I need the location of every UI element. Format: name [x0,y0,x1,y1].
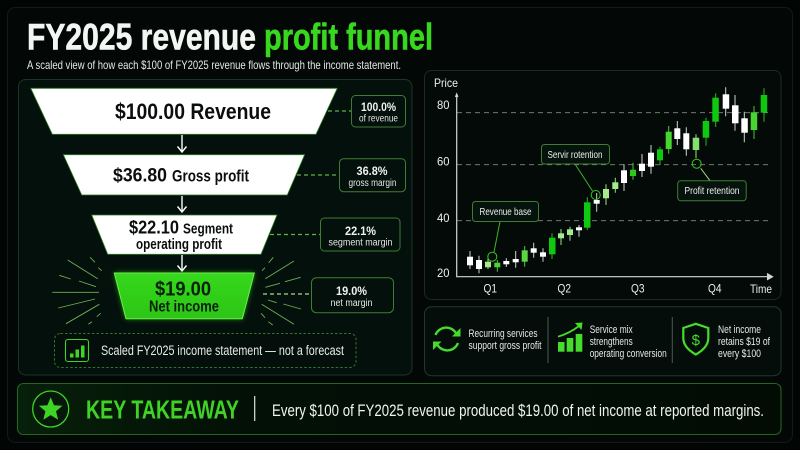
axis labels: Q4 [708,282,722,296]
callout: service retention: Servir rotention [548,149,603,161]
axis labels: Price [434,76,458,90]
text: net income retains: every $100 [718,348,761,360]
connector: gross badge [297,174,339,176]
icon: rising bars [558,322,582,352]
callout: profit retention [678,159,746,201]
callout: revenue base: Revenue base [480,206,532,218]
badge: 22.1% segment margin: segment margin [328,238,392,248]
icon: star badge [33,391,69,427]
light green candles [485,134,699,269]
axes [456,94,772,280]
title: FY2025 revenue [27,16,256,58]
badge: 100.0% of revenue: of revenue [359,114,398,124]
badge: 36.8% gross margin: 36.8% [356,164,388,178]
icon: dollar shield [683,324,708,354]
funnel stage: net income [114,273,254,319]
connector: net badge [263,293,311,295]
badge: 36.8% gross margin: gross margin [348,178,396,189]
subtitle: A scaled view of how each $100 of FY2025 revenue flows through the income statement. [27,58,401,72]
text: net income retains: Net income [718,324,761,336]
text: service mix: operating conversion [590,348,667,360]
badge: 19.0% net margin: net margin [330,298,372,309]
arrow: segment to net income [178,255,186,271]
funnel stage: segment operating profit: $22.10 [129,218,179,238]
funnel stage: gross profit [63,155,305,195]
icon: recurring arrows [433,328,460,350]
funnel stage: net income: $19.00 [155,278,211,300]
candlesticks [467,87,767,273]
axis labels: Q3 [631,282,645,296]
funnel stage: net income: Net income [149,298,219,316]
axis labels [434,76,772,296]
text: service mix: Service mix [590,324,633,336]
text: recurring services [468,328,542,352]
callout: profit retention: Profit retention [684,185,740,197]
axis labels: Q2 [558,282,571,296]
axis labels: 40 [437,211,450,225]
badge: 100.0% of revenue: 100.0% [361,100,396,114]
text: recurring services: support gross profit [468,340,542,352]
funnel stage: gross profit: $36.80 [113,166,167,186]
panel: price chart [424,70,781,300]
badge: 22.1% segment margin [320,218,400,251]
arrow: revenue to gross profit [178,135,186,152]
badge: 22.1% segment margin: 22.1% [345,224,376,238]
rays around net income [52,257,301,325]
callout: service retention [542,144,610,200]
arrow: gross profit to segment [178,196,186,212]
icon: dollar shield: $ [692,332,701,349]
note: scaled statement [54,334,356,368]
funnel stage: revenue [31,88,337,134]
text: net income retains: retains $19 of [718,336,771,348]
connector: revenue badge [328,110,351,112]
panel: key takeaway [18,384,781,434]
axis labels: 80 [437,98,450,112]
badge: 36.8% gross margin [340,159,406,192]
bright green candles [549,88,767,259]
axis labels: 20 [437,266,450,280]
mid green candles [494,106,757,272]
connector: segment badge [270,234,320,236]
text: service mix: strengthens [590,336,633,348]
badge: 100.0% of revenue [352,96,406,127]
icon: bar chart [66,340,88,362]
text: net income retains [718,324,771,360]
note: scaled statement: Scaled FY2025 income statement — not a forecast [101,343,344,358]
heading: key takeaway: KEY TAKEAWAY [86,396,239,424]
funnel stage: segment operating profit: Segment [183,222,233,238]
funnel stage: revenue: $100.00 Revenue [115,99,271,124]
gridlines [457,113,771,221]
text: service mix [590,324,667,360]
axis labels: Time [750,282,772,296]
badge: 19.0% net margin [312,278,394,313]
text: recurring services: Recurring services [468,328,538,340]
funnel stage: segment operating profit: operating profit [136,237,222,253]
badge: 19.0% net margin: 19.0% [336,284,367,298]
axis labels: 60 [437,154,450,168]
axis labels: Q1 [484,282,497,296]
funnel stage: gross profit: Gross profit [172,168,249,186]
panel: profit funnel [18,80,412,375]
funnel stage: segment operating profit [92,215,277,254]
panel: drivers [424,307,781,376]
callout: revenue base [472,202,538,261]
title: profit funnel [264,16,433,58]
